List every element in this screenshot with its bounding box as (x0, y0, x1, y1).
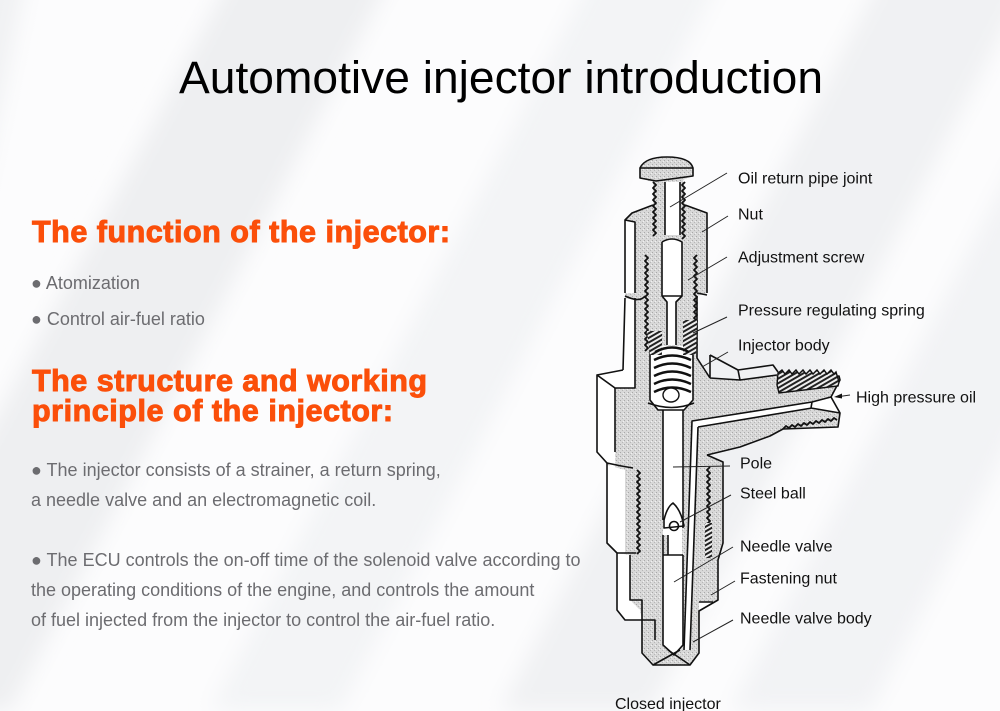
cavities (662, 182, 682, 345)
text block: injector components (31, 460, 441, 510)
text block: injector components: ● The injector consists of a strainer, a return spring, (31, 460, 441, 480)
leader lines (670, 173, 850, 642)
text block: injector components: a needle valve and an electromagnetic coil. (31, 490, 376, 510)
callout labels: Steel ball (740, 486, 806, 502)
bullet list: functions: ● Control air-fuel ratio (31, 309, 205, 329)
unshaded faces (597, 220, 713, 620)
bullet list: functions (31, 273, 205, 329)
heading: structure and working principle: The structure and working (32, 364, 427, 398)
heading: structure and working principle (32, 364, 427, 428)
callout labels: Fastening nut (740, 570, 838, 588)
title: Automotive injector introduction (179, 52, 823, 103)
injector body silhouette (597, 157, 840, 665)
outlines (597, 157, 840, 665)
panel: function of the injector (31, 215, 450, 329)
screw threads (637, 182, 839, 558)
heading: function: The function of the injector: (32, 215, 450, 249)
text block: ECU control: ● The ECU controls the on-off time of the solenoid valve according to (31, 550, 581, 570)
callout labels: Injector body (738, 338, 830, 354)
text block: ECU control: the operating conditions of the engine, and controls the amount (31, 580, 534, 600)
callout labels: High pressure oil (856, 390, 976, 406)
text block: ECU control: of fuel injected from the injector to control the air-fuel ratio. (31, 610, 495, 630)
callout labels: Nut (738, 206, 763, 224)
callout labels: Pole (740, 456, 772, 472)
text block: ECU control (31, 550, 581, 630)
heading: structure and working principle: principle of the injector: (32, 394, 393, 428)
callout labels: Pressure regulating spring (738, 302, 925, 320)
diagram: closed injector cross-section (597, 157, 850, 665)
callout labels: Adjustment screw (738, 250, 865, 266)
callout labels: Oil return pipe joint (738, 170, 873, 188)
callout labels: Needle valve (740, 538, 833, 556)
callout labels: Needle valve body (740, 610, 872, 628)
bullet list: functions: ● Atomization (31, 273, 140, 293)
panel: structure and working principle (31, 364, 581, 630)
pressure regulating spring (647, 320, 697, 408)
callout labels (738, 170, 976, 628)
